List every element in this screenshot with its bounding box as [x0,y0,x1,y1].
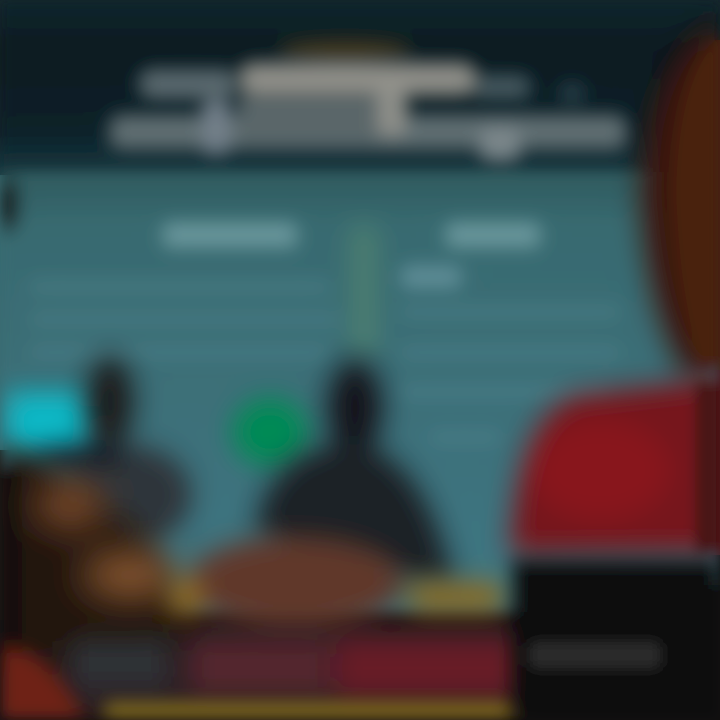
lower dark band [0,622,560,720]
right figure red shirt [510,378,720,560]
figure left [35,356,192,545]
right figure dark lower [512,560,720,720]
figure center [255,360,455,585]
lower right fill [530,585,720,720]
header band [0,0,720,175]
head right edge fill [672,35,720,365]
red table band [70,638,520,698]
left foreground figure [0,445,195,660]
center divider [352,225,376,355]
left edge shadow [0,179,16,231]
left edge dark strip [0,470,22,660]
yellow bottom strip [105,704,515,720]
table warm area [170,536,502,628]
left figure skin patches [34,481,178,599]
right foreground figure head [640,20,720,375]
green panel [232,398,308,466]
bottom left arm [0,645,85,720]
shirt right edge [695,382,720,552]
title block [110,40,626,160]
column headings [163,223,540,288]
cyan panel [6,392,90,452]
text rows [30,280,620,444]
teal body panel [0,172,720,612]
